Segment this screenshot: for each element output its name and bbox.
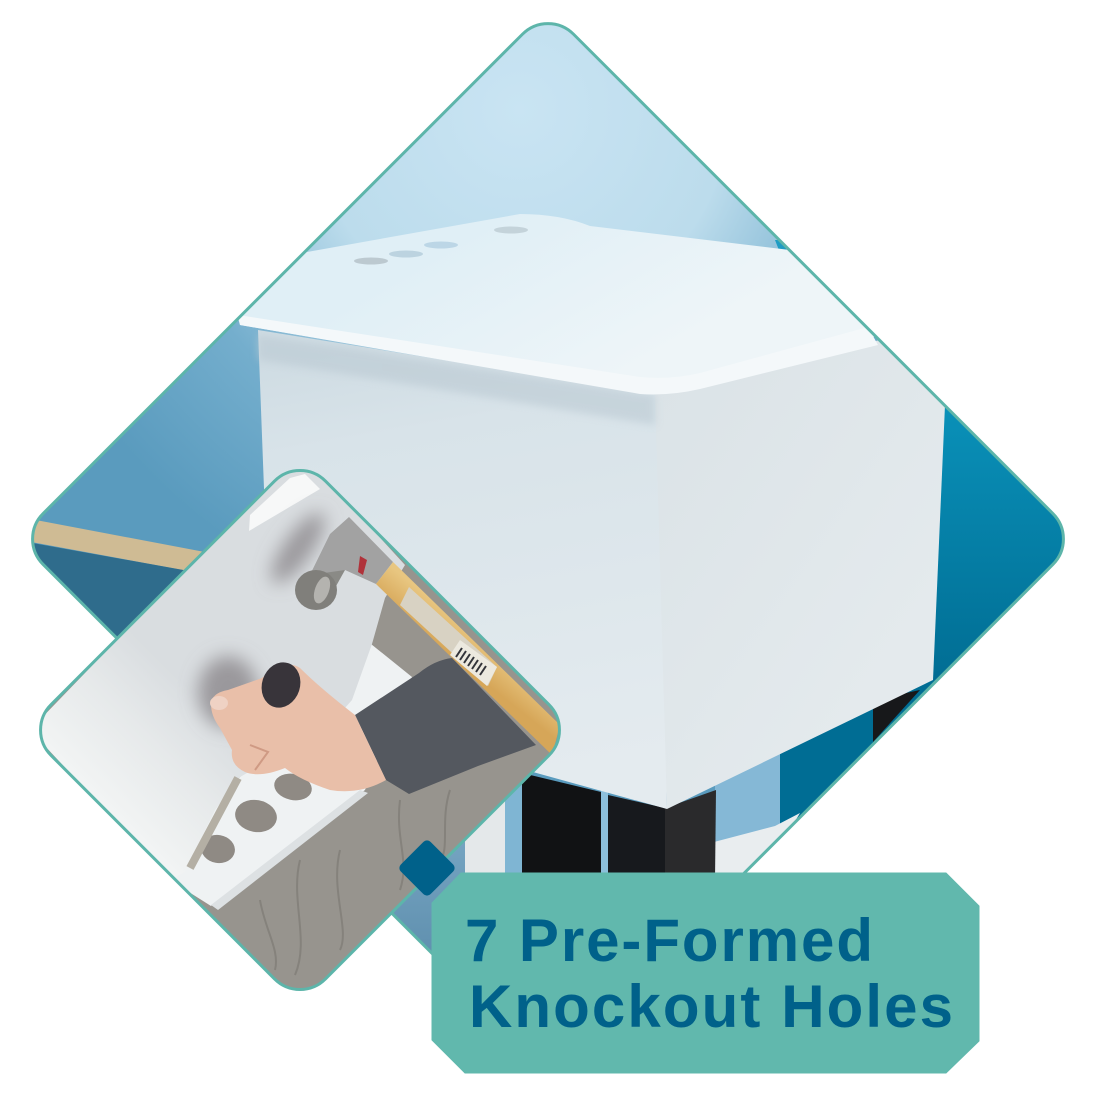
white highlight at top — [249, 474, 320, 531]
hammer handle — [376, 562, 560, 755]
hammer head — [295, 517, 393, 610]
banner background — [432, 873, 979, 1073]
shadow under lid — [258, 335, 655, 425]
corner strip behind the sink — [775, 240, 787, 250]
white baseboard lower right — [715, 813, 800, 872]
thumb nail and finger — [210, 696, 268, 770]
title text: 7 Pre-Formed — [465, 907, 873, 974]
dark blue lower wall — [780, 682, 930, 824]
inset diamond border — [26, 456, 574, 1004]
sink body front face — [258, 330, 667, 809]
knockout holes on deck — [354, 226, 528, 264]
sink lid — [238, 214, 880, 393]
callout: title banner — [432, 873, 979, 1073]
title text: Knockout Holes — [469, 973, 953, 1040]
chisel shaft — [190, 778, 238, 868]
sink wall grey sheet — [30, 450, 405, 880]
lower wall strip — [394, 842, 465, 950]
wall background — [34, 25, 878, 808]
icon: dark blue diamond accent — [397, 838, 457, 898]
sleeve — [355, 658, 536, 794]
white tray with holes — [170, 644, 412, 910]
handle label and barcode — [400, 587, 497, 686]
right lower wall — [715, 754, 780, 842]
wooden baseboard — [34, 520, 202, 570]
panel: inset hammer and chisel photo — [39, 469, 561, 991]
hand and hammer shadows — [198, 506, 334, 728]
sink body side face — [655, 340, 945, 809]
deep blue wall on right — [933, 408, 1062, 675]
hand — [211, 665, 386, 791]
white pipe — [465, 802, 505, 872]
chisel handle — [262, 662, 300, 708]
panel: main sink photo diamond — [31, 22, 1065, 955]
wood floor — [46, 539, 558, 988]
blue wall gap — [505, 784, 522, 872]
lid front lip — [238, 315, 878, 394]
blue rug — [34, 543, 184, 636]
sink legs — [522, 690, 920, 880]
